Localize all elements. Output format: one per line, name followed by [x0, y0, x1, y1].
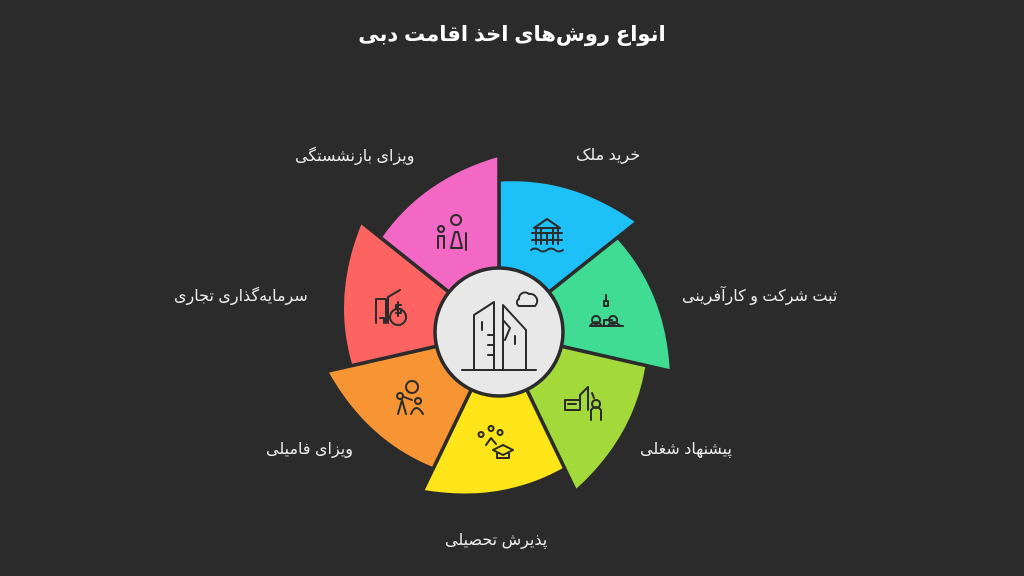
segment: red — [320, 197, 499, 366]
label: company: ثبت شرکت و کارآفرینی — [682, 288, 837, 305]
label: job: پیشنهاد شغلی — [640, 441, 732, 458]
icon: graduate — [479, 426, 513, 458]
label: study: پذیرش تحصیلی — [445, 532, 547, 549]
icon: house on water — [531, 219, 563, 252]
icon: business meeting — [590, 295, 623, 326]
segment: lime — [468, 332, 648, 501]
label: investment: سرمایه‌گذاری تجاری — [174, 288, 308, 305]
segment: green — [499, 237, 705, 440]
label: property: خرید ملک — [576, 147, 640, 164]
icon: office and person — [565, 387, 601, 420]
segment: yellow — [374, 332, 565, 529]
icon: building with dollar — [376, 290, 406, 325]
label: family: ویزای فامیلی — [266, 441, 353, 458]
segment: pink — [380, 129, 585, 332]
segment: blue — [499, 180, 637, 332]
icon: city center — [462, 292, 537, 370]
segment: orange — [308, 272, 499, 469]
center circle — [435, 268, 563, 396]
title: انواع روش‌های اخذ اقامت دبی — [358, 23, 666, 46]
label: retirement: ویزای بازنشستگی — [295, 148, 414, 165]
icon: elderly and child — [438, 215, 466, 250]
icon: family — [397, 381, 423, 414]
